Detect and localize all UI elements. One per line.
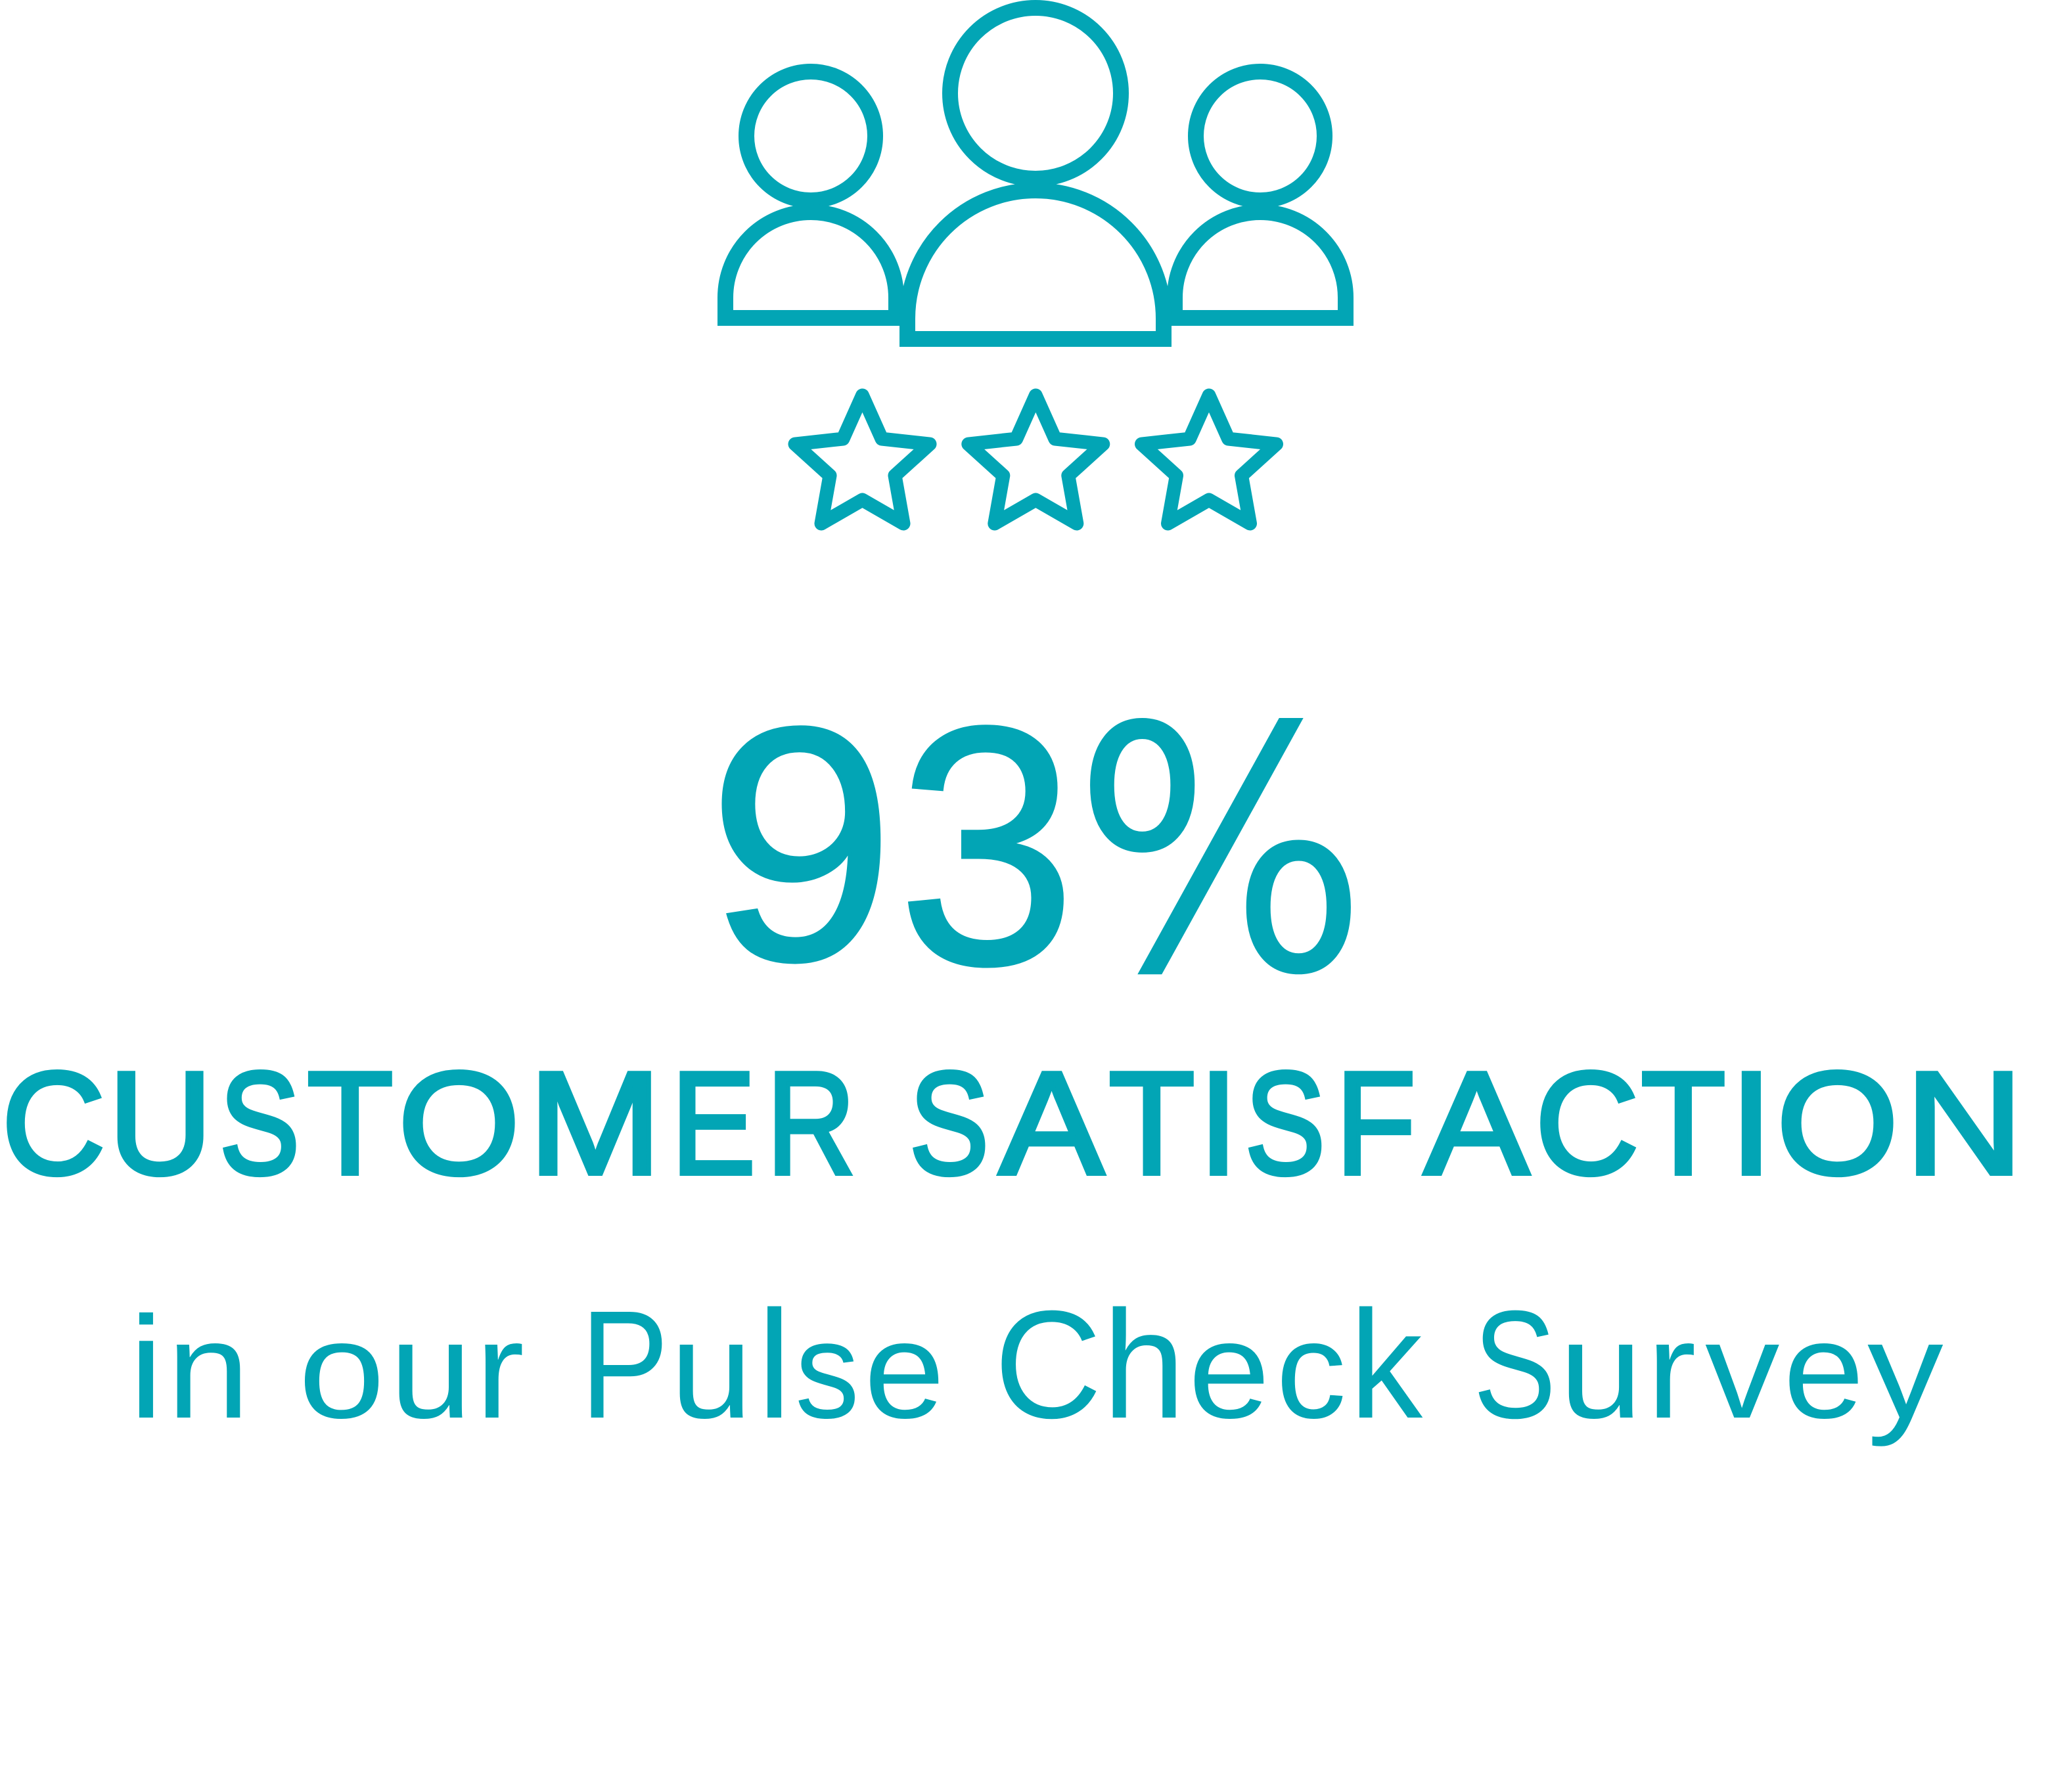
subheading: in our Pulse Check Survey: n [167, 1293, 250, 1447]
subheading: in our Pulse Check Survey: r [1647, 1293, 1696, 1447]
heading: customer satisfaction: N [1905, 1042, 2023, 1205]
heading: customer satisfaction: S [909, 1042, 989, 1205]
icon: star 2 [968, 395, 1103, 524]
icon: star 1 [795, 395, 930, 524]
heading: customer satisfaction: A [999, 1042, 1104, 1205]
heading: customer satisfaction: C [2, 1042, 105, 1205]
heading: customer satisfaction: T [1641, 1042, 1725, 1205]
heading: customer satisfaction: U [108, 1042, 212, 1205]
subheading: in our Pulse Check Survey: v [1705, 1293, 1779, 1447]
icon: left person [725, 72, 896, 318]
subheading: in our Pulse Check Survey: o [298, 1293, 385, 1447]
subheading: in our Pulse Check Survey: i [129, 1286, 164, 1448]
subheading: in our Pulse Check Survey: u [390, 1293, 472, 1447]
heading: customer satisfaction: T [307, 1042, 393, 1205]
subheading: in our Pulse Check Survey: u [670, 1293, 753, 1447]
big statistic: 93%: 3 [898, 657, 1076, 1035]
subheading: in our Pulse Check Survey: C [994, 1278, 1102, 1450]
heading: customer satisfaction: C [1536, 1042, 1639, 1205]
subheading: in our Pulse Check Survey: y [1867, 1293, 1944, 1447]
heading: customer satisfaction: I [1730, 1042, 1773, 1205]
heading: customer satisfaction: S [1245, 1042, 1325, 1205]
subheading: in our Pulse Check Survey: e [1783, 1293, 1864, 1447]
subheading: in our Pulse Check Survey: u [1559, 1293, 1643, 1447]
heading: customer satisfaction: I [1199, 1042, 1238, 1205]
heading: customer satisfaction: O [398, 1042, 520, 1205]
subheading: in our Pulse Check Survey: s [795, 1293, 859, 1447]
icon: three rating stars [795, 395, 1276, 524]
heading: customer satisfaction: T [1109, 1042, 1195, 1205]
icon: group of three people [725, 8, 1346, 339]
heading: customer satisfaction: R [767, 1042, 855, 1205]
big statistic: 93%: % [1073, 655, 1368, 1050]
icon: star 3 [1142, 395, 1276, 524]
subheading: in our Pulse Check Survey: h [1103, 1278, 1185, 1450]
subheading: in our Pulse Check Survey: k [1350, 1278, 1423, 1450]
subheading: in our Pulse Check Survey: r [476, 1293, 524, 1447]
subheading: in our Pulse Check Survey: l [757, 1278, 792, 1450]
subheading: in our Pulse Check Survey: e [1188, 1293, 1270, 1447]
subheading: in our Pulse Check Survey: S [1473, 1278, 1556, 1450]
big statistic: 93%: 9 [708, 659, 895, 1030]
subheading: in our Pulse Check Survey: e [864, 1293, 945, 1447]
heading: customer satisfaction: M [528, 1042, 662, 1205]
icon: right person [1175, 72, 1346, 318]
subheading: in our Pulse Check Survey: c [1276, 1293, 1346, 1447]
icon: centre person [907, 8, 1164, 339]
subheading: in our Pulse Check Survey: P [580, 1278, 669, 1450]
heading: customer satisfaction: S [219, 1042, 300, 1205]
heading: customer satisfaction: O [1777, 1042, 1898, 1205]
heading: customer satisfaction: A [1424, 1042, 1529, 1205]
heading: customer satisfaction: E [671, 1042, 756, 1205]
heading: customer satisfaction: F [1336, 1042, 1416, 1205]
